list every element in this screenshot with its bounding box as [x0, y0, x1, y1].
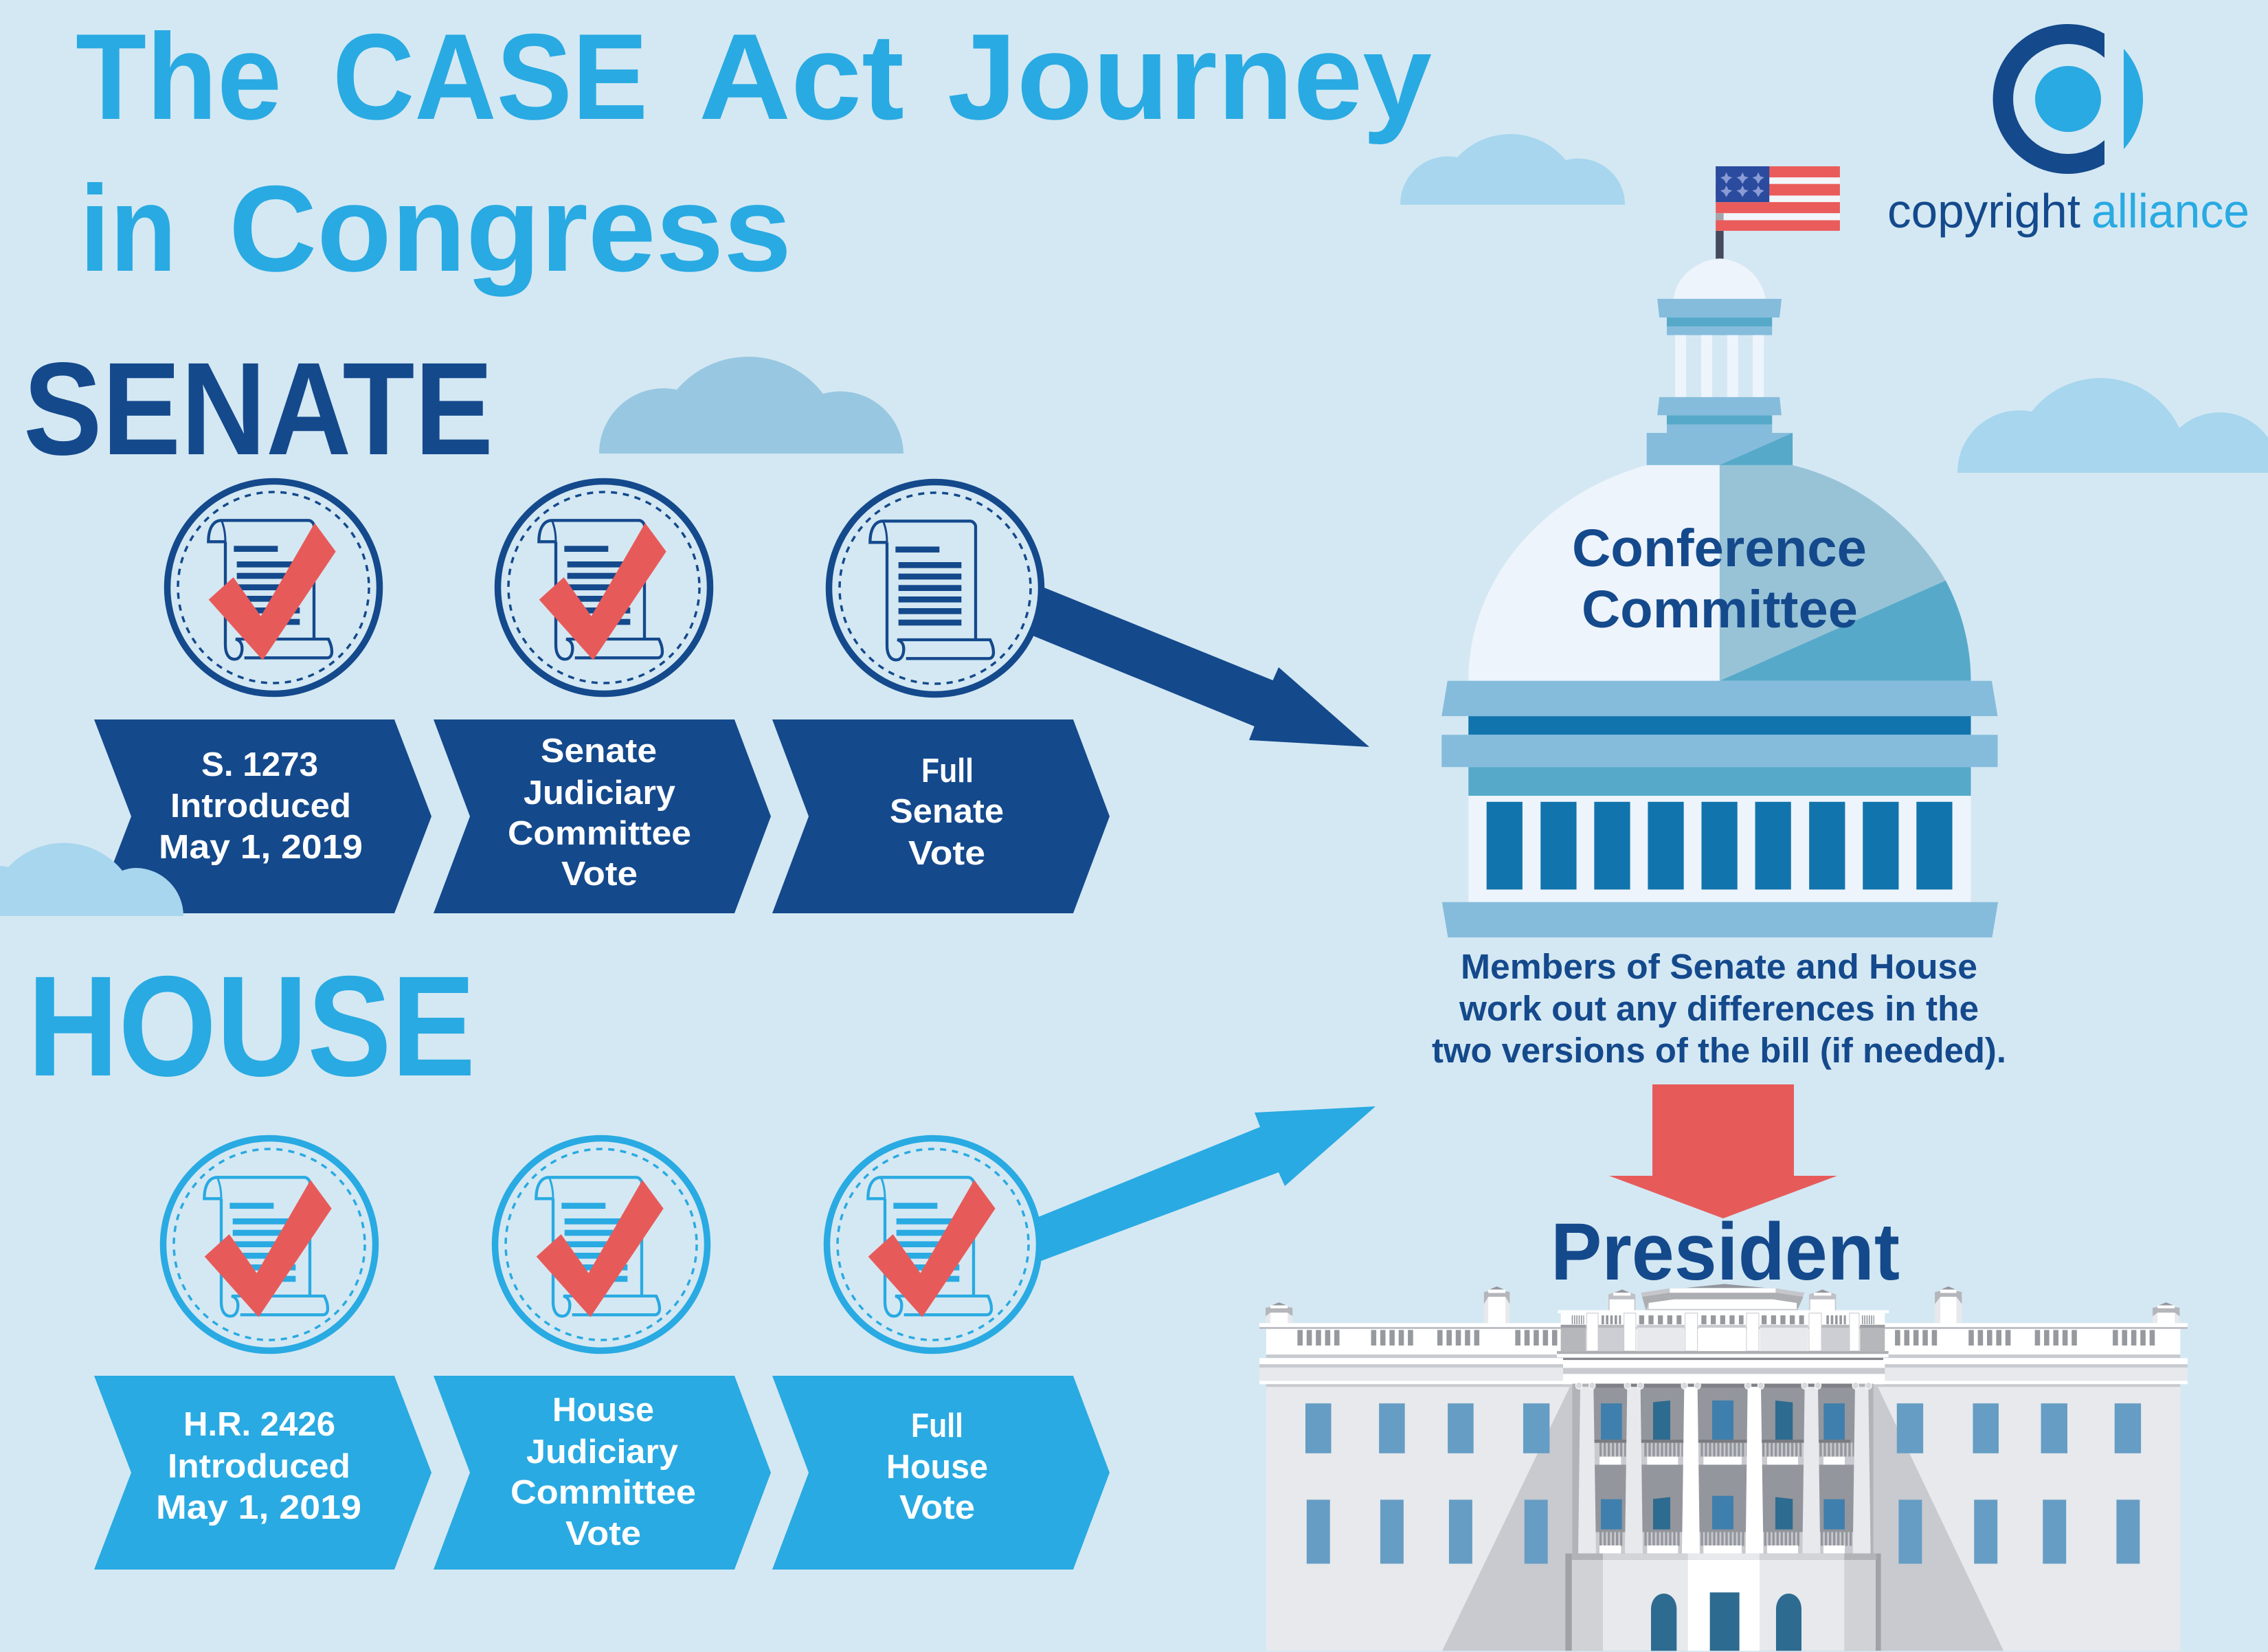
label: president: President: [1551, 1207, 1900, 1297]
title: CASE: [333, 8, 648, 145]
heading: senate: SENATE: [23, 335, 493, 482]
title: Journey: [947, 8, 1432, 145]
label: conference committee: Committee: [1582, 580, 1858, 639]
chevron: senate judiciary committee vote: Vote: [561, 856, 638, 893]
chevron: full senate vote: Vote: [908, 835, 985, 872]
logo: copyright alliance: alliance: [2091, 184, 2249, 238]
chevron: H.R. 2426 introduced: May 1, 2019: [156, 1489, 361, 1526]
arrow: senate to conference committee: [1017, 581, 1369, 747]
cloud: lower left over chevron: [0, 843, 183, 916]
icon: full house vote, checked: [827, 1138, 1039, 1351]
chevron: S. 1273 introduced: May 1, 2019: [159, 829, 363, 866]
icon: capitol building with flag: [1441, 166, 1998, 937]
chevron: house judiciary committee vote: Vote: [565, 1515, 641, 1552]
icon: senate judiciary vote, checked: [497, 481, 710, 694]
text: conference description: two versions of the bill (if needed).: [1432, 1031, 2006, 1070]
cloud: top centre: [1400, 134, 1625, 205]
chevron: full house vote: Vote: [899, 1489, 975, 1526]
title: Congress: [229, 160, 791, 297]
chevron: house judiciary committee vote: [434, 1376, 771, 1570]
arrow: house to conference committee: [1017, 1106, 1376, 1270]
icon: house judiciary vote, checked: [495, 1138, 708, 1351]
icon: senate bill introduced, checked: [168, 481, 379, 694]
chevron: senate judiciary committee vote: Committee: [508, 815, 691, 852]
logo: copyright alliance: [1887, 24, 2249, 238]
cloud: beside senate heading: [599, 357, 903, 454]
cloud: right edge: [1957, 378, 2268, 473]
label: conference committee: Conference: [1572, 519, 1867, 578]
title: [76, 8, 1432, 297]
chevron: S. 1273 introduced: [94, 719, 431, 913]
title: Act: [699, 8, 904, 145]
chevron: full house vote: House: [886, 1449, 988, 1486]
chevron: S. 1273 introduced: S. 1273: [201, 746, 318, 783]
chevron: house judiciary committee vote: Committee: [510, 1474, 696, 1511]
chevron: senate judiciary committee vote: [434, 719, 771, 913]
chevron: senate judiciary committee vote: Judiciary: [524, 774, 675, 812]
chevron: H.R. 2426 introduced: H.R. 2426: [183, 1406, 335, 1443]
icon: full senate vote, pending: [829, 482, 1042, 694]
chevron: S. 1273 introduced: Introduced: [170, 788, 351, 825]
icon: house bill introduced, checked: [164, 1138, 375, 1351]
icon: white house: [1259, 1284, 2188, 1651]
arrow: down to president: [1609, 1084, 1837, 1218]
title: The: [76, 8, 282, 145]
text: conference description: work out any differences in the: [1459, 989, 1979, 1028]
title: in: [80, 160, 177, 297]
chevron: house judiciary committee vote: House: [552, 1392, 654, 1429]
chevron: house judiciary committee vote: Judiciary: [526, 1433, 678, 1471]
chevron: senate judiciary committee vote: Senate: [541, 733, 657, 770]
chevron: full senate vote: Full: [921, 752, 974, 790]
text: conference description: [1432, 947, 2006, 1070]
heading: house: HOUSE: [27, 947, 475, 1106]
chevron: H.R. 2426 introduced: [94, 1376, 431, 1570]
chevron: full house vote: Full: [911, 1407, 963, 1444]
chevron: H.R. 2426 introduced: Introduced: [168, 1448, 350, 1485]
logo: copyright alliance: copyright: [1887, 184, 2080, 238]
chevron: full senate vote: Senate: [890, 793, 1004, 830]
chevron: full house vote: [772, 1376, 1110, 1570]
text: conference description: Members of Senate and House: [1461, 947, 1977, 986]
chevron: full senate vote: [772, 719, 1110, 913]
label: conference committee: [1572, 519, 1867, 639]
